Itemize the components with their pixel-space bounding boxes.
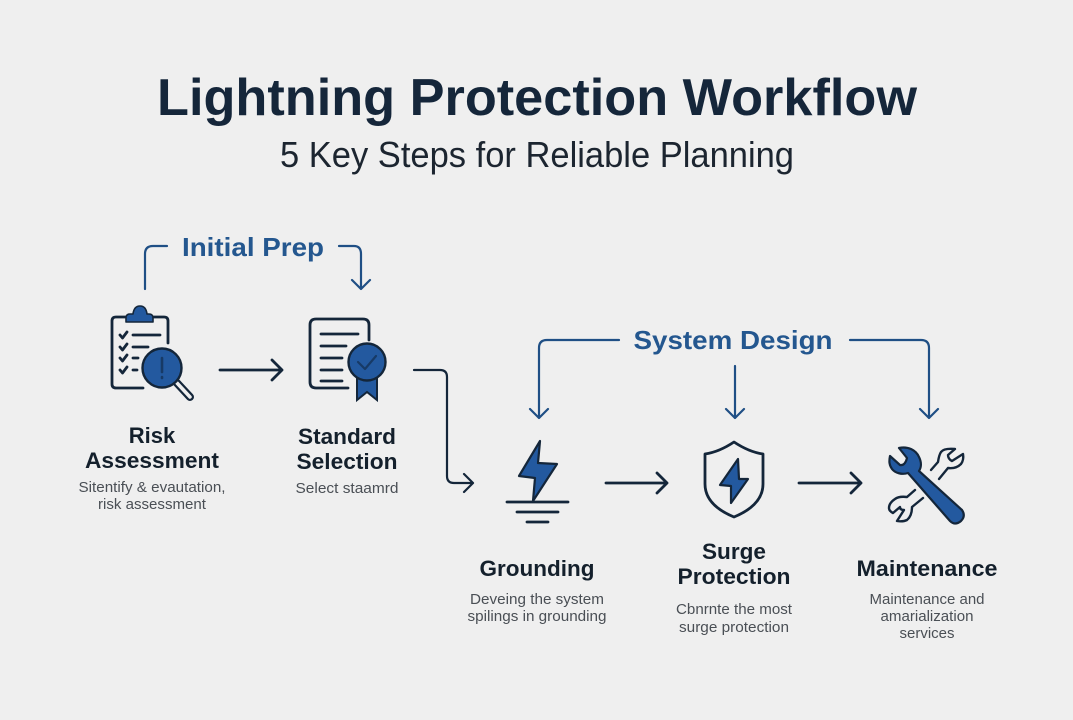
step: Risk Assessment: risk assessment (98, 497, 206, 513)
step: Maintenance: Maintenance (856, 556, 998, 581)
step: Maintenance: Maintenance and (870, 592, 984, 608)
arrow: System Design centre (726, 366, 744, 418)
title: Lightning Protection Workflow (157, 69, 918, 127)
bracket arrow: Initial Prep left (145, 246, 167, 289)
bracket arrow: Initial Prep right (339, 246, 370, 289)
icon: certificate document (310, 319, 386, 400)
icon: shield with bolt (705, 442, 763, 517)
bracket arrow: System Design left (530, 340, 619, 418)
step: Standard Selection: Select staamrd (296, 481, 398, 497)
step: Risk Assessment: Assessment (85, 448, 220, 473)
step: Maintenance (856, 556, 998, 642)
step: Surge Protection: surge protection (679, 620, 789, 636)
icon: lightning with ground (507, 441, 568, 522)
step: Risk Assessment: Risk (129, 423, 176, 448)
icon: clipboard with magnifier (112, 306, 190, 397)
step: Grounding: Grounding (480, 556, 594, 581)
step: Risk Assessment: Sitentify & evautation, (78, 480, 226, 496)
step: Maintenance: services (900, 626, 954, 642)
step: Grounding: Deveing the system (470, 592, 604, 608)
step: Maintenance: amarialization (880, 609, 974, 625)
step: Surge Protection (676, 539, 792, 636)
step: Standard Selection (296, 424, 398, 497)
arrow: surge to maintenance (799, 473, 861, 493)
arrow: risk to standard (220, 360, 282, 380)
step: Surge Protection: Surge (702, 539, 766, 564)
subtitle: 5 Key Steps for Reliable Planning (280, 134, 794, 175)
arrow: grounding to surge (606, 473, 667, 493)
step: Surge Protection: Protection (678, 564, 790, 589)
step: Grounding: spilings in grounding (468, 609, 606, 625)
step: Risk Assessment (78, 423, 226, 513)
step: Standard Selection: Selection (296, 449, 398, 474)
step: Grounding (468, 556, 606, 625)
group label: System Design: System Design (634, 325, 832, 355)
icon: crossed wrenches (889, 447, 964, 524)
elbow arrow: standard to grounding (414, 370, 473, 492)
step: Standard Selection: Standard (298, 424, 396, 449)
step: Surge Protection: Cbnrnte the most (676, 602, 792, 618)
bracket arrow: System Design right (850, 340, 938, 418)
group label: Initial Prep: Initial Prep (182, 232, 324, 262)
